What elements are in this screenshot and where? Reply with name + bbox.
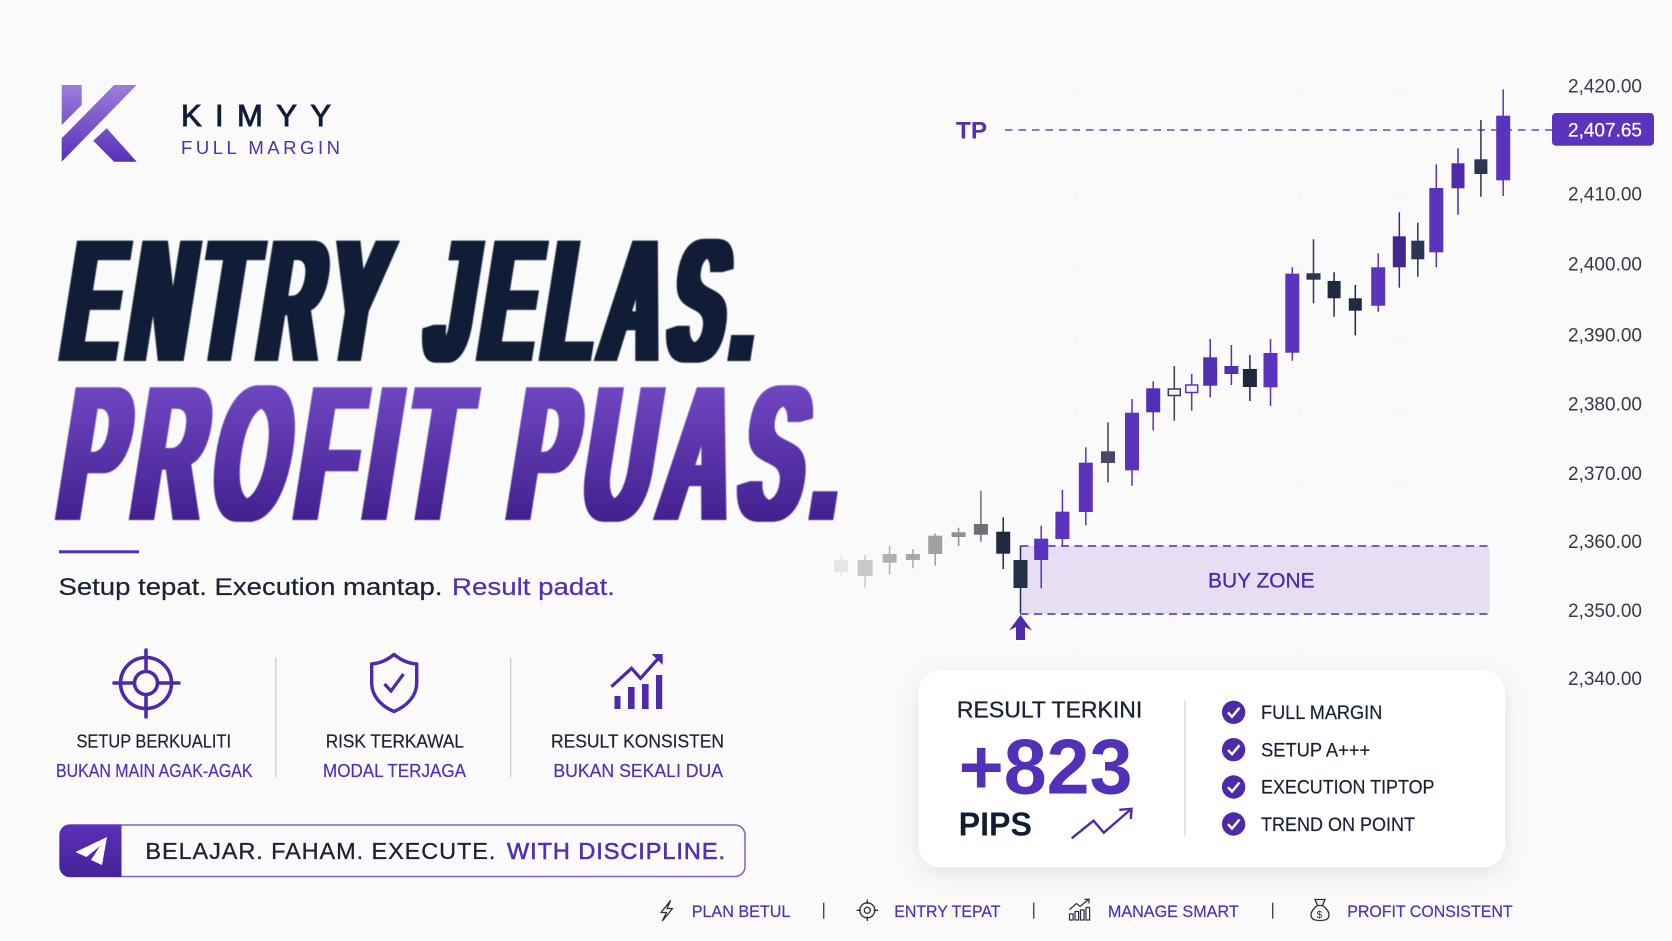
grid lines [880, 70, 1560, 680]
checklist: FULL MARGIN [1261, 703, 1382, 724]
big number: +823 [959, 722, 1133, 810]
panel: feature column risk [323, 654, 466, 781]
price axis labels: 2,360.00 [1568, 532, 1642, 553]
footer label: MANAGE SMART [1108, 902, 1239, 921]
icon: bolt [661, 901, 672, 921]
tagline [58, 574, 615, 601]
callout text [145, 838, 725, 864]
price axis labels [1568, 76, 1642, 690]
card heading: RESULT TERKINI [957, 697, 1142, 723]
footer label: PROFIT CONSISTENT [1347, 902, 1513, 921]
unit: PIPS [959, 807, 1032, 844]
price axis labels: 2,410.00 [1568, 185, 1642, 206]
brand name: KIMYY [181, 98, 331, 133]
callout text: BELAJAR. FAHAM. EXECUTE. [145, 838, 495, 864]
icon: small chart [1070, 899, 1090, 920]
checklist: TREND ON POINT [1261, 815, 1415, 836]
icon: target [114, 650, 179, 717]
icon: money bag: $ [1317, 910, 1323, 921]
headline: PROFIT PUAS.: PROFIT [48, 346, 495, 562]
price axis labels: 2,350.00 [1568, 601, 1642, 622]
price axis labels: 2,420.00 [1568, 76, 1642, 97]
buy zone [1020, 546, 1490, 614]
headline: ENTRY JELAS.: ENTRY [53, 204, 412, 399]
candlesticks [834, 89, 1510, 613]
sublabel: BUKAN SEKALI DUA [553, 761, 723, 781]
icon: growth chart [611, 654, 663, 709]
logo: Kimyy Full Margin [62, 85, 340, 162]
price axis labels: 2,390.00 [1568, 326, 1642, 347]
icon: money bag [1311, 900, 1329, 921]
panel: feature column result [551, 654, 724, 781]
price axis labels: 2,380.00 [1568, 395, 1642, 416]
checklist [1222, 701, 1434, 836]
sublabel: BUKAN MAIN AGAK-AGAK [56, 761, 252, 781]
callout text: WITH DISCIPLINE. [507, 838, 725, 864]
icon: K mark [62, 85, 137, 162]
brand subtitle: FULL MARGIN [181, 137, 340, 158]
chart: candlestick price chart [834, 70, 1654, 690]
text: JELAS. [416, 204, 785, 399]
sublabel: MODAL TERJAGA [323, 761, 466, 781]
accent rule [59, 550, 139, 553]
price axis labels: 2,400.00 [1568, 255, 1642, 276]
price axis labels: 2,370.00 [1568, 464, 1642, 485]
panel: feature column setup [56, 650, 252, 781]
label: RESULT KONSISTEN [551, 732, 724, 752]
icon: crosshair [856, 900, 878, 921]
label: SETUP BERKUALITI [76, 732, 231, 752]
current price tag: 2,407.65 [1568, 121, 1642, 142]
tagline: Result padat. [452, 574, 615, 601]
buy zone label: BUY ZONE [1208, 569, 1315, 592]
footer label: ENTRY TEPAT [894, 902, 1000, 921]
price axis labels: 2,340.00 [1568, 669, 1642, 690]
label: RISK TERKAWAL [326, 732, 464, 752]
current price tag [1552, 113, 1654, 146]
panel: result card [918, 670, 1505, 867]
checklist: SETUP A+++ [1261, 740, 1370, 761]
text: PUAS. [498, 346, 873, 562]
footer strip [661, 899, 1513, 921]
checklist: EXECUTION TIPTOP [1261, 778, 1434, 799]
icon: paper plane [76, 837, 107, 865]
TP level: TP [956, 118, 987, 145]
callout: discipline bar [60, 824, 745, 877]
icon block [60, 824, 122, 877]
tagline: Setup tepat. Execution mantap. [58, 574, 442, 601]
footer label: PLAN BETUL [692, 902, 790, 921]
icon: shield check [372, 654, 417, 712]
arrow: entry marker [1009, 615, 1032, 640]
icon: trend arrow [1072, 809, 1132, 838]
